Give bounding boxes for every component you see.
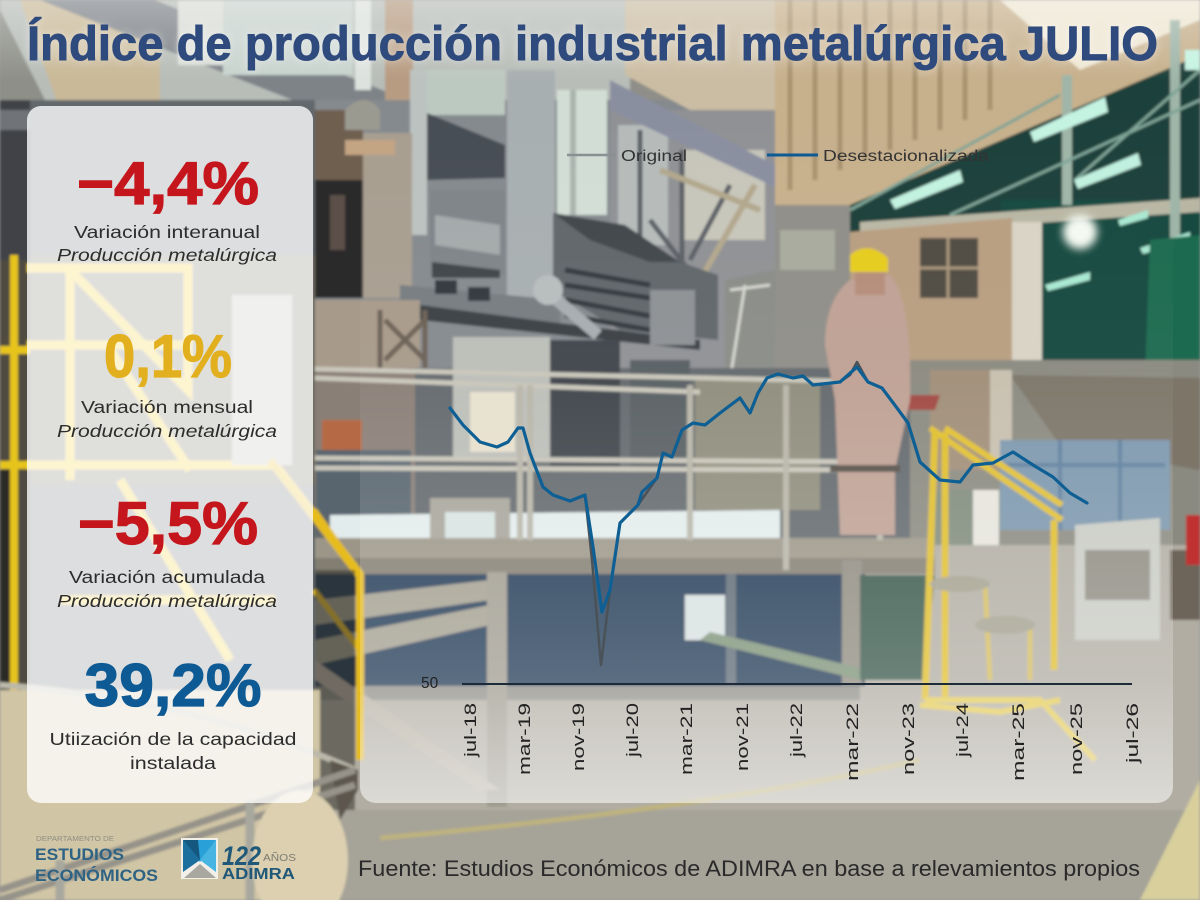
icon: ADIMRA mark <box>181 838 218 879</box>
platform <box>315 538 935 574</box>
axis: nov-21 <box>734 703 752 771</box>
KPI: variación acumulada: −5,5% <box>78 490 258 557</box>
legend: Original <box>621 148 687 165</box>
railings <box>315 369 890 470</box>
KPI: variación acumulada: Variación acumulada <box>69 567 265 587</box>
roof <box>760 0 1200 205</box>
KPI: variación acumulada <box>57 490 277 611</box>
legend: Desestacionalizada <box>823 148 989 165</box>
machine area: main tones <box>315 100 775 375</box>
logo: ADIMRA 122 años: 122 <box>222 841 261 871</box>
gearbox <box>430 190 505 275</box>
KPI: variación acumulada: Producción metalúrgica <box>57 591 277 611</box>
axis: nov-19 <box>570 703 588 771</box>
yellow stairs right <box>930 428 1062 520</box>
source note: Fuente: Estudios Económicos de ADIMRA en base a relevamientos propios <box>358 856 1140 881</box>
right mid <box>910 360 1200 550</box>
base band <box>400 285 560 325</box>
axis: nov-23 <box>900 703 918 775</box>
axis: mar-22 <box>844 703 862 781</box>
axis: jul-24 <box>954 703 972 758</box>
panel: KPI cards <box>27 106 313 803</box>
KPI: variación mensual: Producción metalúrgica <box>57 421 277 441</box>
axis: 50 <box>421 675 439 692</box>
panel: chart background <box>360 100 1173 803</box>
cabin <box>850 218 1012 365</box>
KPI: utilización de la capacidad instalada: Utiización de la capacidad <box>50 729 296 749</box>
KPI: utilización de la capacidad instalada: 39,2% <box>84 652 262 719</box>
KPI: variación mensual: Variación mensual <box>81 397 253 417</box>
lower left tan lattice <box>315 300 420 370</box>
white cart <box>1075 518 1160 640</box>
chart: producción metalúrgica series <box>421 148 1142 781</box>
KPI: variación mensual <box>57 323 277 441</box>
KPI: utilización de la capacidad instalada <box>50 652 296 773</box>
logo: Estudios Económicos <box>35 834 158 885</box>
saddle <box>553 213 718 340</box>
legend <box>567 148 989 165</box>
top light fade behind title <box>0 0 1200 80</box>
area under left panel <box>30 100 315 700</box>
title: Índice de producción industrial metalúrgica JULIO <box>27 17 1158 71</box>
axis: jul-26 <box>1124 703 1142 764</box>
logo: Estudios Económicos: ECONÓMICOS <box>35 866 158 885</box>
KPI: variación interanual: Producción metalúrgica <box>57 245 277 265</box>
lattice bay <box>610 110 775 370</box>
logo: ADIMRA 122 años: AÑOS <box>263 851 296 864</box>
axis <box>421 675 1142 781</box>
logo: Estudios Económicos: ESTUDIOS <box>35 845 124 864</box>
beam <box>610 80 775 187</box>
line: original <box>585 362 882 665</box>
axis: jul-22 <box>788 703 806 758</box>
axis: jul-20 <box>624 703 642 758</box>
window and column <box>427 70 505 115</box>
axis: jul-18 <box>462 703 480 758</box>
KPI: variación interanual <box>57 150 277 265</box>
KPI: variación mensual: 0,1% <box>104 323 232 390</box>
axis: mar-21 <box>678 703 696 775</box>
KPI: variación interanual: Variación interanual <box>74 222 260 242</box>
worker <box>825 275 910 535</box>
axis: mar-19 <box>516 703 534 775</box>
axis: nov-25 <box>1068 703 1086 775</box>
floor <box>0 545 1200 900</box>
line: desestacionalizada <box>450 367 1087 612</box>
logo: Estudios Económicos: DEPARTAMENTO DE <box>36 834 114 843</box>
KPI: variación interanual: −4,4% <box>77 150 259 217</box>
left strip <box>0 100 30 265</box>
tan body <box>360 133 412 298</box>
mid band behind chart <box>315 368 935 558</box>
logo: ADIMRA 122 años: ADIMRA <box>222 866 295 883</box>
title: Índice de producción industrial metalúrgica JULIO <box>27 17 1158 71</box>
KPI: utilización de la capacidad instalada: instalada <box>130 753 216 773</box>
dark green bay <box>850 55 1200 380</box>
top of scene <box>0 0 630 110</box>
logo: ADIMRA 122 años <box>181 838 296 883</box>
axis: mar-25 <box>1010 703 1028 781</box>
